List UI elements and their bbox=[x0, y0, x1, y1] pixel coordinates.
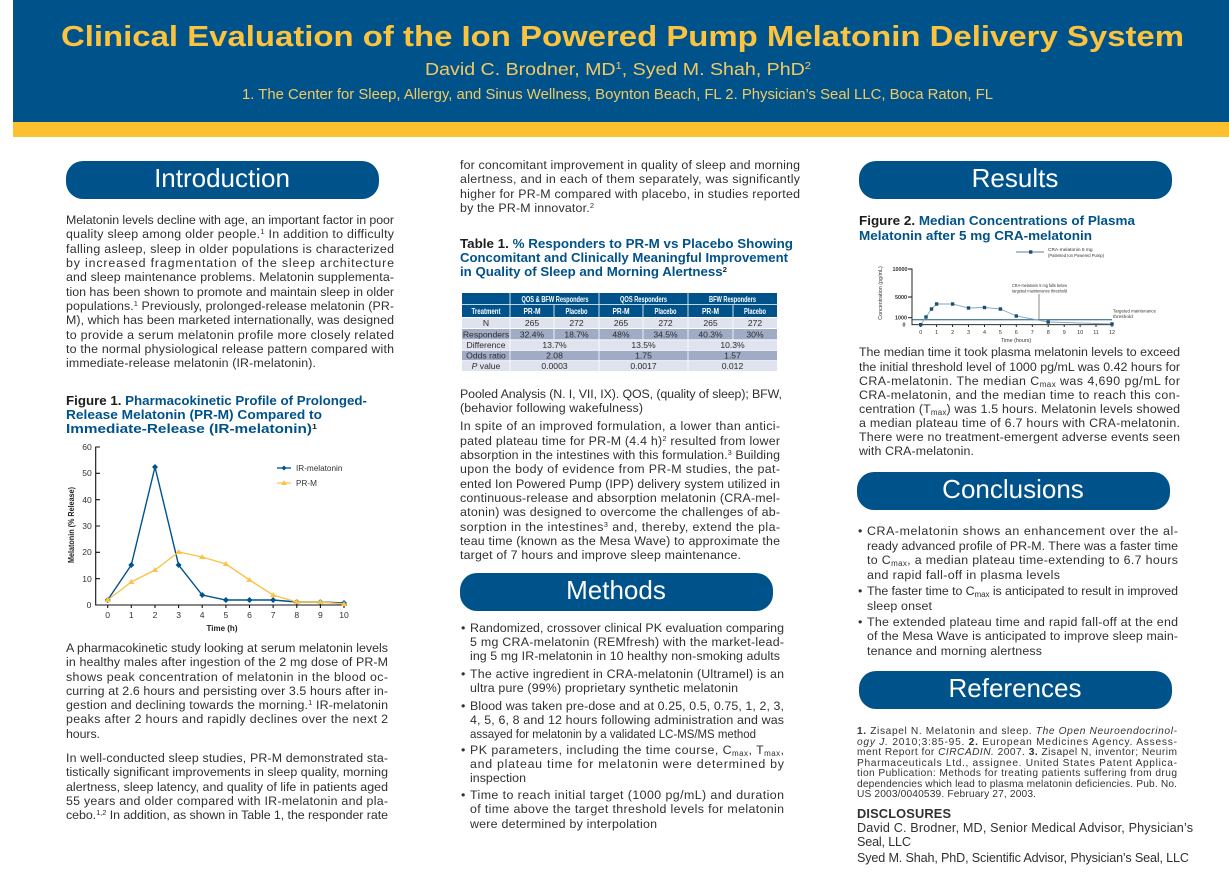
table 1 bbox=[462, 293, 777, 371]
line chart: figure 2: 6 bbox=[1015, 330, 1018, 336]
heading: Results: Results bbox=[972, 163, 1058, 193]
chart annotations: CRA-melatonin 5 mg bbox=[1048, 247, 1093, 253]
text block: improved formulation: ented Ion Powered Pump (IPP) delivery system utilized in bbox=[460, 477, 780, 491]
text block: improved formulation: 3 bbox=[604, 520, 608, 529]
bullet list: methods: and plateau time for melatonin were determined by bbox=[470, 757, 785, 771]
heading: Introduction: Introduction bbox=[154, 163, 290, 193]
text block: sleep studies: cebo. bbox=[66, 808, 96, 822]
text block: improved formulation: teau time (known as the Mesa Wave) to approximate the bbox=[460, 534, 780, 548]
text block: introduction: 1 bbox=[260, 227, 265, 236]
text block: results: max bbox=[931, 408, 946, 417]
line chart: figure 2: 12 bbox=[1109, 330, 1115, 336]
text block: references bbox=[857, 726, 1178, 800]
table 1: 0.0003 bbox=[541, 361, 568, 371]
text block: column two continuation: alertness, and in each of them separately, was significantly bbox=[460, 172, 801, 186]
heading: Introduction bbox=[66, 161, 379, 199]
line chart: figure 1: 50 bbox=[82, 468, 92, 478]
bullet list: methods: The active ingredient in CRA-melatonin (Ultramel) is an bbox=[470, 667, 784, 681]
text block: improved formulation: atonin) was designed to overcome the challenges of ab- bbox=[460, 505, 780, 519]
bullet list: methods: • bbox=[461, 621, 465, 635]
text block: sleep studies: tistically significant improvements in sleep quality, morning bbox=[66, 765, 388, 779]
table 1: 1.57 bbox=[724, 350, 741, 360]
text block: improved formulation: resulted from lower bbox=[667, 434, 780, 448]
table 1: P value bbox=[472, 361, 501, 371]
text block: sleep studies: In addition, as shown in Table 1, the responder rate bbox=[106, 808, 388, 822]
heading: Methods bbox=[460, 573, 773, 611]
table 1: 265 bbox=[525, 318, 539, 328]
text block: results: max bbox=[1040, 380, 1056, 389]
figure 1 heading: Immediate-Release (IR-melatonin) bbox=[66, 421, 272, 436]
text block: introduction: by increased fragmentation of the sleep architecture bbox=[66, 256, 394, 270]
chart annotations: (Patented Ion Powered Pump) bbox=[1048, 253, 1104, 259]
text block: sleep studies bbox=[66, 751, 388, 822]
line chart: figure 1: 0 bbox=[87, 600, 92, 610]
table 1 heading: in Quality of Sleep and Morning Alertness bbox=[460, 264, 713, 279]
text block: references: tion Publication: Methods for treating patients suffering from drug bbox=[857, 768, 1177, 779]
chart annotations: Targeted maintenance bbox=[1113, 308, 1156, 314]
table 1: N bbox=[483, 318, 489, 328]
text block: references: 1. Zisapel N. Melatonin and sleep. The Open Neuroendocrinol- bbox=[857, 726, 1178, 737]
text block: introduction: falling asleep, sleep in older populations is characterized bbox=[66, 242, 394, 256]
bullet list: methods: assayed for melatonin by a validated LC-MS/MS method bbox=[470, 727, 756, 741]
bullet list: methods: • bbox=[461, 788, 465, 802]
line chart: figure 1: 20 bbox=[82, 547, 92, 557]
table 1: Responders bbox=[463, 330, 509, 340]
line chart: figure 2: 10000 bbox=[892, 267, 908, 273]
text block: improved formulation bbox=[460, 419, 780, 562]
bullet list: conclusions: is anticipated to result in improved bbox=[989, 584, 1178, 598]
text block: pharmacokinetic study: peaks after 2 hours and rapidly declines over the next 2 bbox=[66, 712, 388, 726]
table 1: 1.75 bbox=[635, 350, 652, 360]
line chart: figure 1: 10 bbox=[339, 610, 349, 620]
text block: references: US 2003/0040539. February 27, 2003. bbox=[857, 789, 1036, 800]
text block: improved formulation: Building bbox=[732, 448, 780, 462]
table 1: BFW Responders bbox=[709, 295, 756, 304]
table 1: QOS Responders bbox=[620, 295, 667, 304]
disclosures: Seal, LLC bbox=[857, 835, 911, 849]
line chart: figure 1: Time (h) bbox=[207, 624, 238, 633]
text block: pharmacokinetic study bbox=[66, 641, 388, 741]
authors: David C. Brodner, MD bbox=[425, 59, 595, 79]
disclosures: David C. Brodner, MD, Senior Medical Advisor, Physician’s bbox=[857, 821, 1193, 835]
line chart: figure 1: 30 bbox=[82, 521, 92, 531]
text block: column two continuation: higher for PR-M compared with placebo, in studies reported bbox=[460, 187, 800, 201]
bullet list: methods: of time above the target threshold levels for melatonin bbox=[470, 802, 784, 816]
text block: introduction: In addition to difficulty bbox=[265, 227, 395, 241]
figure 1 heading: Figure 1. Pharmacokinetic Profile of Prolonged- bbox=[66, 393, 367, 408]
bullet list: conclusions: The faster time to C bbox=[867, 584, 975, 598]
authors: 2 bbox=[805, 61, 811, 72]
text block: introduction: Melatonin levels decline with age, an important factor in poor bbox=[66, 213, 394, 227]
bullet list: conclusions: of the Mesa Wave is anticipated to improve sleep main- bbox=[867, 629, 1178, 643]
heading: Conclusions bbox=[857, 472, 1170, 510]
line chart: figure 1: 3 bbox=[176, 610, 181, 620]
bullet list: methods: max bbox=[732, 749, 748, 758]
table 1 heading: 2 bbox=[723, 265, 727, 274]
text block: column two continuation: for concomitant improvement in quality of sleep and morning bbox=[460, 158, 800, 172]
line chart: figure 1: 9 bbox=[318, 610, 323, 620]
table 1: 48% bbox=[612, 330, 630, 340]
text block: results: the initial threshold level of 1000 pg/mL was 0.42 hours for bbox=[859, 360, 1180, 374]
header banner bbox=[13, 0, 1229, 137]
text block: improved formulation: 3 bbox=[728, 448, 732, 457]
table 1: PR-M bbox=[524, 307, 540, 316]
line chart: figure 2: 5000 bbox=[895, 295, 907, 301]
bullet list: conclusions: • bbox=[858, 584, 862, 598]
text block: improved formulation: and, thereby, extend the pla- bbox=[608, 520, 780, 534]
table footnote: Pooled Analysis (N. I, VII, IX). QOS, (quality of sleep); BFW, bbox=[460, 387, 782, 401]
text block: results: a median plateau time of 6.7 hours with CRA-melatonin. bbox=[859, 416, 1180, 430]
table 1: 0.012 bbox=[722, 361, 743, 371]
text block: results bbox=[858, 345, 1180, 458]
table 1: 2.08 bbox=[546, 350, 563, 360]
table 1: 10.3% bbox=[720, 340, 745, 350]
text block: references: dependencies which lead to plasma melatonin deficiencies. Pub. No. bbox=[857, 779, 1177, 790]
figure 1 heading: 1 bbox=[312, 422, 317, 431]
bullet list: methods: inspection bbox=[470, 771, 526, 785]
bullet list: conclusions: • bbox=[858, 524, 862, 538]
text block: references: ment Report for CIRCADIN. 2007. 3. Zisapel N, inventor; Neurim bbox=[857, 747, 1177, 758]
table 1: 40.3% bbox=[698, 330, 723, 340]
bullet list: conclusions: ready advanced profile of PR-M. There was a faster time bbox=[867, 539, 1178, 553]
text block: introduction: populations. bbox=[66, 299, 134, 313]
bullet list: conclusions bbox=[858, 524, 1178, 658]
line chart: figure 2: 5 bbox=[999, 330, 1002, 336]
chart annotations: CRA-melatonin 5 mg falls below bbox=[1012, 283, 1067, 289]
bullet list: methods: • bbox=[461, 699, 465, 713]
disclosures: DISCLOSURES bbox=[857, 806, 951, 821]
disclosures: Syed M. Shah, PhD, Scientific Advisor, Physician’s Seal, LLC bbox=[857, 851, 1189, 865]
chart annotations: targeted maintenance threshold bbox=[1012, 288, 1067, 294]
line chart: figure 2 bbox=[878, 247, 1156, 344]
table 1: 265 bbox=[703, 318, 718, 328]
line chart: figure 2: Time (hours) bbox=[1001, 338, 1031, 344]
bullet list: conclusions: CRA-melatonin shows an enhancement over the al- bbox=[867, 524, 1178, 538]
table 1: 32.4% bbox=[520, 330, 545, 340]
text block: column two continuation: 2 bbox=[590, 201, 594, 210]
heading: Conclusions: Conclusions bbox=[942, 474, 1084, 504]
text block: improved formulation: 2 bbox=[662, 434, 667, 443]
text block: improved formulation: continuous-release and absorption melatonin (CRA-mel- bbox=[460, 491, 780, 505]
line chart: figure 2: 7 bbox=[1031, 330, 1034, 336]
text block: pharmacokinetic study: 1 bbox=[308, 698, 312, 707]
table 1: Placebo bbox=[654, 307, 677, 316]
text block: pharmacokinetic study: in healthy males after ingestion of the 2 mg dose of PR-M bbox=[66, 655, 388, 669]
table 1: 13.5% bbox=[631, 340, 656, 350]
bullet list: conclusions: max bbox=[975, 590, 990, 599]
bullet list: methods: were determined by interpolation bbox=[469, 817, 657, 831]
table 1: QOS & BFW Responders bbox=[522, 295, 589, 304]
text block: column two continuation: by the PR-M innovator. bbox=[460, 201, 590, 215]
line chart: figure 1 bbox=[67, 442, 349, 633]
chart annotations bbox=[1012, 247, 1156, 320]
heading: Results bbox=[859, 161, 1172, 199]
text block: improved formulation: absorption in the intestines with this formulation. bbox=[460, 448, 728, 462]
text block: pharmacokinetic study: IR-melatonin bbox=[312, 698, 388, 712]
line chart: figure 1: 5 bbox=[224, 610, 229, 620]
figure 2 heading: Melatonin after 5 mg CRA-melatonin bbox=[859, 228, 1092, 243]
bullet list: conclusions: The extended plateau time and rapid fall-off at the end bbox=[867, 615, 1178, 629]
bullet list: methods: Time to reach initial target (1000 pg/mL) and duration bbox=[470, 788, 784, 802]
table 1: 0.0017 bbox=[630, 361, 657, 371]
line chart: figure 2: 3 bbox=[967, 330, 970, 336]
disclosures bbox=[857, 806, 1193, 865]
heading: References bbox=[859, 671, 1172, 709]
line chart: figure 2: 0 bbox=[902, 322, 906, 328]
table 1: Odds ratio bbox=[466, 350, 506, 360]
line chart: figure 1: 60 bbox=[82, 442, 92, 452]
text block: sleep studies: alertness, sleep latency, and quality of life in patients aged bbox=[66, 780, 388, 794]
text block: results: ) was 1.5 hours. Melatonin levels showed bbox=[946, 402, 1180, 416]
text block: pharmacokinetic study: gestion and declining towards the morning. bbox=[66, 698, 308, 712]
bullet list: methods: , T bbox=[749, 743, 764, 757]
text block: sleep studies: In well-conducted sleep studies, PR-M demonstrated sta- bbox=[66, 751, 388, 765]
line chart: figure 2: 4 bbox=[983, 330, 986, 336]
bullet list: conclusions: to C bbox=[867, 553, 891, 567]
text block: sleep studies: 55 years and older compared with IR-melatonin and pla- bbox=[66, 794, 388, 808]
text block: improved formulation: sorption in the intestines bbox=[460, 520, 603, 534]
text block: improved formulation: In spite of an improved formulation, a lower than antici- bbox=[460, 419, 780, 433]
table 1 heading: Table 1. % Responders to PR-M vs Placebo Showing bbox=[460, 236, 793, 251]
bullet list: conclusions: tenance and morning alertness bbox=[867, 644, 1042, 658]
bullet list: methods: 5 mg CRA-melatonin (REMfresh) with the market-lead- bbox=[470, 635, 784, 649]
bullet list: conclusions: • bbox=[858, 615, 862, 629]
table 1: 272 bbox=[658, 318, 673, 328]
bullet list: methods: max bbox=[764, 749, 780, 758]
bullet list: methods: ultra pure (99%) proprietary synthetic melatonin bbox=[470, 681, 738, 695]
text block: introduction: tion has been shown to promote and maintain sleep in older bbox=[66, 285, 394, 299]
text block: results: There were no treatment-emergent adverse events seen bbox=[859, 430, 1180, 444]
affiliations: 1. The Center for Sleep, Allergy, and Sinus Wellness, Boynton Beach, FL 2. Physician’s Seal LLC, Boca Raton, FL bbox=[242, 87, 993, 103]
bullet list: methods: • bbox=[461, 743, 465, 757]
table 1: 265 bbox=[614, 318, 628, 328]
table 1: Placebo bbox=[566, 307, 588, 316]
line chart: figure 2: 0 bbox=[919, 330, 922, 336]
text block: introduction: Previously, prolonged-release melatonin (PR- bbox=[138, 299, 394, 313]
table 1: 34.5% bbox=[653, 330, 678, 340]
bullet list: conclusions: sleep onset bbox=[867, 599, 933, 613]
line chart: figure 2: 8 bbox=[1047, 330, 1050, 336]
authors: , Syed M. Shah, PhD bbox=[622, 59, 805, 79]
bullet list: conclusions: max bbox=[891, 559, 907, 568]
text block: introduction: quality sleep among older people. bbox=[66, 227, 260, 241]
text block: column two continuation bbox=[460, 158, 801, 215]
line chart: figure 1: 7 bbox=[271, 610, 276, 620]
bullet list: methods: PK parameters, including the time course, C bbox=[470, 743, 732, 757]
chart legend: IR-melatonin bbox=[296, 464, 343, 473]
text block: introduction: to provide a serum melatonin profile more closely related bbox=[66, 328, 394, 342]
bullet list: methods: Blood was taken pre-dose and at 0.25, 0.5, 0.75, 1, 2, 3, bbox=[470, 699, 784, 713]
text block: results: was 4,690 pg/mL for bbox=[1056, 374, 1180, 388]
table footnote: (behavior following wakefulness) bbox=[460, 401, 643, 415]
table 1: PR-M bbox=[612, 307, 630, 316]
table 1: 272 bbox=[748, 318, 762, 328]
title: Clinical Evaluation of the Ion Powered Pump Melatonin Delivery System bbox=[61, 21, 1184, 53]
figure 1 heading bbox=[66, 393, 367, 436]
chart annotations: threshold bbox=[1113, 314, 1133, 320]
text block: improved formulation: target of 7 hours and improve sleep maintenance. bbox=[460, 548, 741, 562]
table 1: 18.7% bbox=[564, 330, 589, 340]
line chart: figure 1: 6 bbox=[247, 610, 252, 620]
bullet list: conclusions: and rapid fall-off in plasma levels bbox=[867, 568, 1060, 582]
text block: introduction: M), which has been marketed internationally, was designed bbox=[66, 313, 394, 327]
text block: pharmacokinetic study: curring at 2.6 hours and persisting over 3.5 hours after in- bbox=[66, 684, 388, 698]
text block: pharmacokinetic study: hours. bbox=[66, 727, 100, 741]
table 1: Treatment bbox=[472, 307, 501, 316]
table 1: Difference bbox=[466, 340, 506, 350]
text block: introduction: 1 bbox=[134, 299, 138, 308]
text block: introduction: to the normal physiological release pattern compared with bbox=[66, 342, 394, 356]
table 1 heading bbox=[460, 236, 793, 279]
text block: improved formulation: pated plateau time for PR-M (4.4 h) bbox=[460, 434, 662, 448]
line chart: figure 2: 2 bbox=[951, 330, 954, 336]
line chart: figure 2: 9 bbox=[1063, 330, 1066, 336]
bullet list: methods: , bbox=[781, 743, 784, 757]
line chart: figure 2: 11 bbox=[1093, 330, 1099, 336]
table 1: 30% bbox=[746, 330, 764, 340]
figure 1 heading: Release Melatonin (PR-M) Compared to bbox=[66, 407, 322, 422]
text block: references: ogy J. 2010;3:85-95. 2. European Medicines Agency. Assess- bbox=[857, 737, 1177, 748]
line chart: figure 1: Melatonin (% Release) bbox=[67, 487, 76, 563]
table 1: Placebo bbox=[744, 307, 766, 316]
authors: 1 bbox=[616, 61, 622, 72]
bullet list: methods: • bbox=[461, 667, 465, 681]
line chart: figure 2: 10 bbox=[1077, 330, 1083, 336]
line chart: figure 2: 1 bbox=[935, 330, 938, 336]
figure 2 heading bbox=[859, 213, 1136, 243]
text block: sleep studies: 1,2 bbox=[96, 808, 106, 817]
text block: results: CRA-melatonin. The median C bbox=[859, 374, 1039, 388]
line chart: figure 1: 8 bbox=[294, 610, 299, 620]
chart legend bbox=[277, 464, 343, 488]
line chart: figure 1: 4 bbox=[200, 610, 205, 620]
table footnote bbox=[460, 387, 782, 415]
bullet list: methods: ing 5 mg IR-melatonin in 10 healthy non-smoking adults bbox=[470, 649, 780, 663]
text block: introduction: immediate-release melatonin (IR-melatonin). bbox=[66, 356, 316, 370]
text block: introduction bbox=[66, 213, 395, 370]
line chart: figure 1: 1 bbox=[129, 610, 134, 620]
text block: pharmacokinetic study: A pharmacokinetic study looking at serum melatonin levels bbox=[66, 641, 388, 655]
bullet list: methods: 4, 5, 6, 8 and 12 hours following administration and was bbox=[470, 713, 784, 727]
text block: results: centration (T bbox=[859, 402, 931, 416]
bullet list: methods bbox=[461, 621, 785, 831]
line chart: figure 1: 2 bbox=[153, 610, 158, 620]
text block: improved formulation: upon the body of evidence from PR-M studies, the pat- bbox=[460, 462, 780, 476]
heading: References: References bbox=[949, 673, 1081, 703]
chart legend: PR-M bbox=[296, 479, 317, 488]
text block: results: with CRA-melatonin. bbox=[858, 444, 974, 458]
text block: results: The median time it took plasma melatonin levels to exceed bbox=[859, 345, 1180, 359]
line chart: figure 1: 40 bbox=[82, 495, 92, 505]
table 1 heading: Concomitant and Clinically Meaningful Improvement bbox=[460, 250, 789, 265]
line chart: figure 2: 1000 bbox=[895, 316, 907, 322]
line chart: figure 2: Concentration (pg/mL) bbox=[878, 266, 884, 320]
line chart: figure 1: 10 bbox=[82, 574, 92, 584]
figure 2 heading: Figure 2. Median Concentrations of Plasma bbox=[859, 213, 1136, 228]
line chart: figure 1: 0 bbox=[105, 610, 110, 620]
text block: references: Pharmaceuticals Ltd., assignee. United States Patent Applica- bbox=[857, 758, 1177, 769]
table 1: 13.7% bbox=[542, 340, 567, 350]
table 1: PR-M bbox=[702, 307, 719, 316]
text block: introduction: and sleep maintenance problems. Melatonin supplementa- bbox=[66, 270, 394, 284]
heading: Methods: Methods bbox=[566, 575, 666, 605]
bullet list: conclusions: , a median plateau time-extending to 6.7 hours bbox=[907, 553, 1178, 567]
table 1: 272 bbox=[569, 318, 584, 328]
text block: results: CRA-melatonin, and the median time to reach this con- bbox=[859, 388, 1180, 402]
text block: pharmacokinetic study: shows peak concentration of melatonin in the blood oc- bbox=[66, 670, 388, 684]
bullet list: methods: Randomized, crossover clinical PK evaluation comparing bbox=[470, 621, 784, 635]
